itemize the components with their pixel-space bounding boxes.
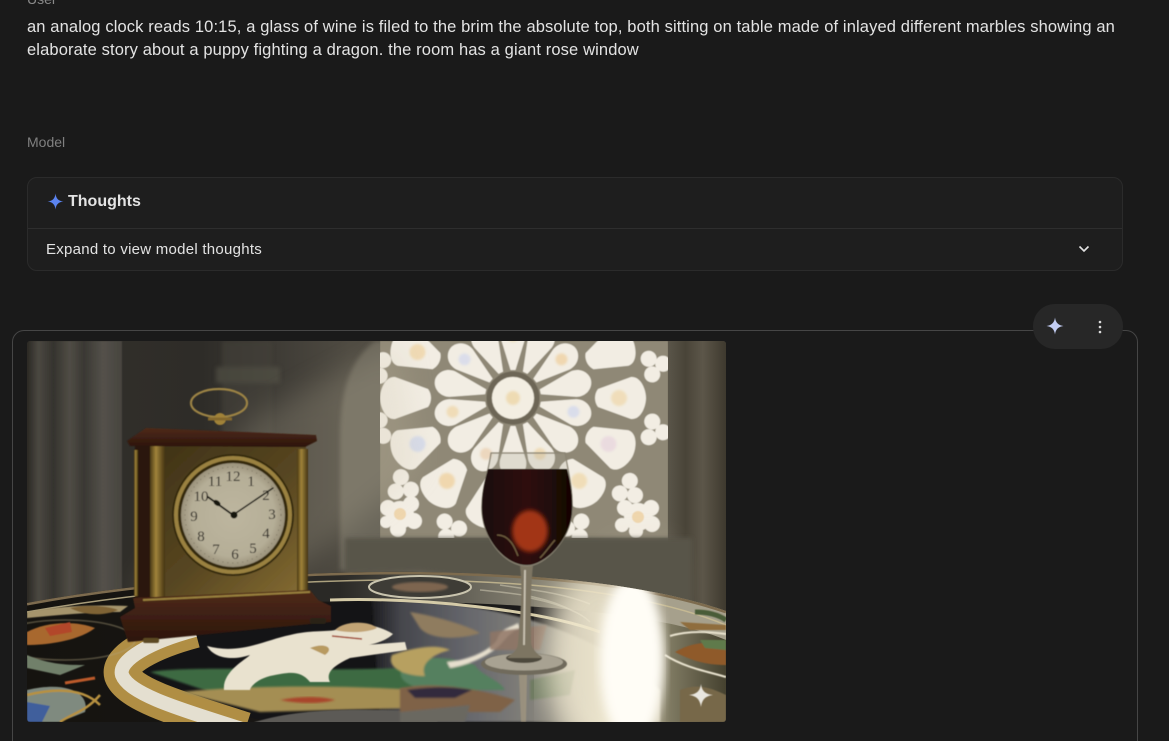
- clock numerals: 8: [197, 529, 205, 545]
- tints: [408, 341, 628, 490]
- expand label: Expand to view model thoughts: [46, 241, 262, 258]
- clock numerals: 9: [190, 509, 198, 525]
- clock handle: [191, 389, 247, 425]
- window sill: [345, 538, 692, 606]
- icon: watermark sparkle: [689, 684, 713, 707]
- clock numerals: [190, 469, 276, 563]
- clock numerals: 12: [226, 469, 240, 485]
- clock numerals: 10: [194, 489, 208, 505]
- curtain: [27, 341, 122, 606]
- window alcove: [340, 341, 692, 585]
- clock body: [143, 443, 306, 598]
- room background: [27, 341, 726, 611]
- icon: chevron down: [1079, 246, 1089, 252]
- divider row: expand text: [28, 228, 1122, 270]
- glass foot: [481, 653, 567, 675]
- corner tracery: [380, 496, 660, 538]
- clock dial: [181, 463, 285, 567]
- table glare: [545, 568, 664, 741]
- clock numerals: 1: [247, 474, 255, 490]
- clock numerals: 3: [268, 507, 276, 523]
- clock base: [120, 590, 331, 643]
- clock numerals: 11: [208, 474, 222, 490]
- panel: thoughts: [27, 177, 1123, 271]
- toolbar pill: [1033, 304, 1123, 349]
- model label: Model: [27, 134, 65, 150]
- top medallion: [369, 576, 471, 598]
- generated image: [27, 341, 726, 722]
- wine reflection: [497, 510, 555, 558]
- middle inlay swirls: [480, 584, 586, 618]
- prompt text: [27, 18, 1115, 59]
- clock numerals: 4: [262, 526, 270, 542]
- table rim: [27, 573, 726, 612]
- medallion field: [350, 601, 374, 602]
- prompt text: elaborate story about a puppy fighting a dragon. the room has a giant rose window: [27, 41, 639, 59]
- panel: response card: [12, 330, 1138, 741]
- clock cornice: [127, 428, 317, 447]
- left inlays: [27, 604, 136, 722]
- clock numerals: 2: [262, 488, 270, 504]
- clock columns: [134, 445, 308, 597]
- clock numerals: 5: [249, 541, 257, 557]
- puppy: [207, 623, 407, 690]
- rose window: [380, 341, 668, 538]
- glass bowl: [482, 453, 572, 566]
- wine: [482, 469, 572, 565]
- clock numerals: 7: [212, 542, 220, 558]
- stone column: [216, 341, 280, 441]
- clock numerals: 6: [231, 547, 239, 563]
- clock hands: [208, 488, 273, 518]
- upper inlay band: [300, 572, 726, 640]
- thoughts heading: Thoughts: [68, 193, 141, 210]
- light rays: [130, 341, 680, 600]
- central medallion ring: [122, 600, 600, 730]
- icon: thoughts sparkle: [48, 194, 64, 210]
- wine glass: [481, 453, 572, 722]
- clock bezel: [172, 454, 294, 576]
- icon: more menu: [1098, 320, 1102, 334]
- clock: [120, 389, 331, 643]
- right inlays: [665, 612, 726, 722]
- icon: sparkle: [1046, 318, 1064, 334]
- right drapes: [668, 341, 726, 611]
- prompt text: an analog clock reads 10:15, a glass of wine is filed to the brim the absolute top, both sitting on table made of inlayed different marbles showing an: [27, 18, 1115, 36]
- green ground: [150, 668, 440, 692]
- glass stem: [507, 566, 542, 658]
- marble table: [27, 572, 726, 722]
- dragon: [391, 612, 575, 722]
- glass reflection: [519, 675, 527, 722]
